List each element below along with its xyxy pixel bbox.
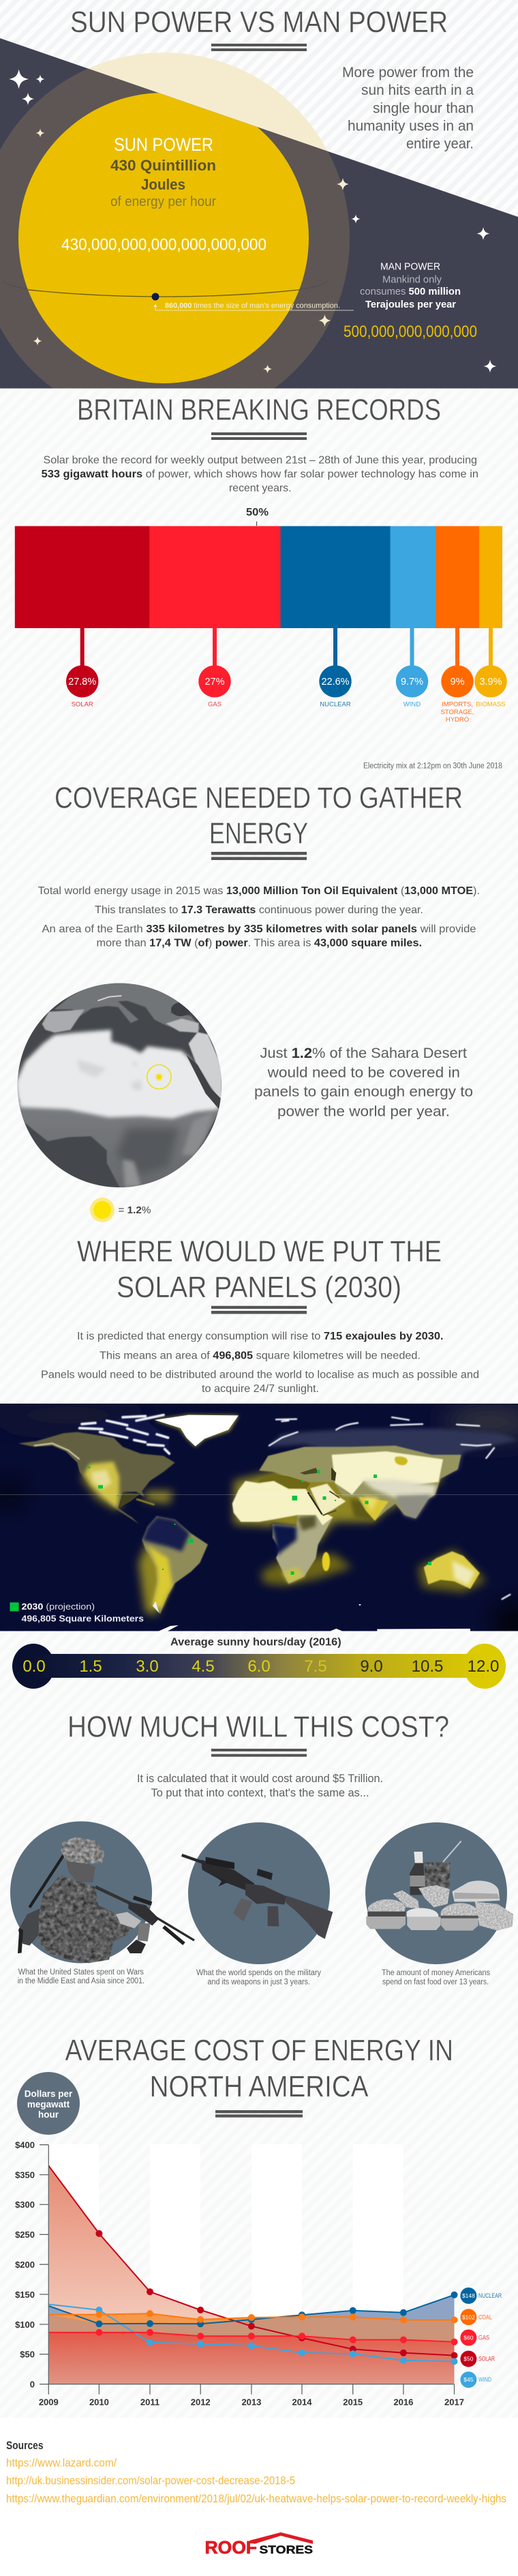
sahara and arabia bright: [232, 1481, 333, 1525]
heading: [65, 2034, 453, 2103]
logo: roof stores: STORES: [259, 2543, 313, 2556]
x axis labels: 2012: [191, 2397, 211, 2408]
intro paragraphs: This means an area of 496,805 square kilometres will be needed.: [100, 1350, 421, 1361]
area: solar: [48, 2165, 455, 2384]
intro paragraph: recent years.: [229, 482, 292, 494]
legend: sun symbol: [90, 1198, 151, 1222]
comparison: fast food: [365, 1822, 513, 1964]
panel: coverage needed: [16, 782, 480, 1222]
callout: imports: STORAGE,: [441, 709, 474, 716]
man power text: 500,000,000,000,000: [344, 323, 477, 341]
series legend: WIND: [478, 2376, 491, 2383]
x axis labels: 2017: [444, 2397, 464, 2408]
scale bar: [12, 1644, 506, 1689]
heading: SOLAR PANELS (2030): [117, 1271, 401, 1304]
series legend: $148: [462, 2292, 475, 2299]
arctic islands: [269, 1417, 510, 1599]
americas: [18, 1414, 239, 1615]
series legend: NUCLEAR: [478, 2292, 502, 2299]
eurasia: [259, 1446, 461, 1521]
y axis labels: $150: [15, 2290, 35, 2300]
series legend: GAS: [478, 2334, 489, 2341]
x axis labels: 2009: [39, 2397, 59, 2408]
heading: ENERGY: [209, 817, 308, 850]
x axis labels: [39, 2397, 464, 2408]
world map: [0, 1404, 518, 1644]
callout: solar: SOLAR: [72, 701, 93, 708]
line: nuclear: [48, 2292, 458, 2327]
callout: solar: 27.8%: [68, 677, 96, 687]
comparison caption: fast food: The amount of money Americans: [382, 1969, 490, 1977]
scale values: 1.5: [79, 1657, 102, 1676]
x axis labels: 2014: [292, 2397, 312, 2408]
sun power text: 430,000,000,000,000,000,000: [61, 236, 266, 254]
50 percent marker: [246, 507, 269, 526]
intro text: [342, 65, 474, 151]
man power text: consumes 500 million: [360, 286, 461, 297]
callout: nuclear: [319, 628, 352, 708]
y axis labels: [15, 2140, 35, 2390]
comparison caption: wars: [18, 1968, 144, 1985]
map legend: 496,805 Square Kilometers: [22, 1614, 144, 1624]
panel: average cost of energy: [15, 2034, 502, 2408]
sun power text: of energy per hour: [110, 194, 216, 209]
intro paragraphs: [41, 1331, 479, 1395]
icon: soldier: [18, 1837, 194, 1963]
man power text: MAN POWER: [380, 261, 440, 273]
turkey: [166, 1018, 199, 1033]
line: wind: [48, 2305, 458, 2365]
stars: [9, 70, 497, 374]
intro text: More power from the: [342, 65, 474, 80]
antarctica: [330, 1629, 470, 1631]
50 percent marker: 50%: [246, 507, 269, 518]
callout: biomass: BIOMASS: [476, 701, 506, 708]
y axis labels: $350: [15, 2170, 35, 2180]
intro paragraphs: This translates to 17.3 Terawatts continuous power during the year.: [95, 904, 423, 916]
panel: where would we put the panels: [0, 1234, 518, 1689]
heading rule: [215, 2110, 303, 2118]
panel: how much will this cost: [10, 1711, 513, 1986]
callout: biomass: 3.9%: [479, 677, 502, 687]
line: coal: [48, 2310, 458, 2323]
sahara statement: [254, 1046, 473, 1119]
callout: imports: 9%: [451, 677, 465, 687]
callout: nuclear: NUCLEAR: [320, 701, 351, 708]
x axis labels: 2016: [393, 2397, 413, 2408]
map legend: 2030 (projection): [22, 1601, 95, 1612]
unit badge: Dollars per: [25, 2089, 73, 2099]
icon: fast food: [366, 1841, 513, 1931]
callout: wind: 9.7%: [401, 677, 423, 687]
callout: biomass: [474, 628, 507, 708]
callout: imports: IMPORTS,: [442, 701, 473, 708]
callout: wind: WIND: [403, 701, 421, 708]
lower africa: [16, 1103, 224, 1189]
globe: sahara map: [16, 982, 224, 1189]
sources: http://uk.businessinsider.com/solar-power-cost-decrease-2018-5: [6, 2474, 295, 2487]
arabia: [189, 1032, 222, 1103]
chart note: Electricity mix at 2:12pm on 30th June 2018: [363, 763, 502, 771]
y axis labels: $400: [15, 2140, 35, 2150]
intro text: [137, 1772, 383, 1799]
series legend: $45: [463, 2376, 474, 2383]
y axis labels: 0: [30, 2379, 35, 2390]
intro text: humanity uses in an: [348, 119, 474, 134]
intro text: single hour than: [373, 101, 474, 116]
size comparison callout: 860,000 times the size of man's energy consumption.: [165, 302, 340, 310]
area: gas: [48, 2333, 455, 2384]
panel: footer: [0, 2418, 518, 2576]
intro paragraphs: An area of the Earth 335 kilometres by 335 kilometres with solar panels will provide: [42, 923, 476, 935]
sahara marker: [147, 1065, 171, 1089]
australia: [424, 1552, 480, 1589]
intro text: sun hits earth in a: [361, 83, 474, 98]
comparison: wars: [10, 1821, 194, 1963]
greenland: [155, 1415, 239, 1447]
iberia: [42, 1009, 85, 1033]
panel: britain breaking records: [15, 393, 507, 771]
intro paragraphs: more than 17,4 TW (of) power. This area is 43,000 square miles.: [97, 938, 422, 949]
intro text: entire year.: [406, 136, 474, 151]
sun halo: [0, 53, 350, 425]
heading rule: [211, 1749, 307, 1757]
heading: AVERAGE COST OF ENERGY IN: [65, 2034, 453, 2067]
scale values: [22, 1657, 499, 1676]
heading: WHERE WOULD WE PUT THE: [77, 1234, 442, 1268]
sun power text: Joules: [141, 176, 185, 193]
y axis labels: $50: [20, 2350, 35, 2360]
callout: gas: GAS: [208, 701, 222, 708]
heading: BRITAIN BREAKING RECORDS: [77, 393, 441, 427]
icon: rifle: [182, 1855, 333, 1939]
sky stripes: [0, 0, 518, 217]
x axis labels: 2011: [140, 2397, 159, 2408]
unit badge: megawatt: [27, 2099, 70, 2109]
alps snow: [97, 996, 121, 1001]
callout: nuclear: 22.6%: [321, 677, 350, 687]
y axis labels: $100: [15, 2320, 35, 2330]
sun power text: SUN POWER: [114, 134, 213, 155]
dark night panel: [0, 38, 518, 389]
comparison caption: fast food: [382, 1969, 490, 1986]
area: coal and nuclear overlap: [48, 2315, 455, 2384]
series legend: COAL: [478, 2313, 492, 2320]
unit badge: hour: [38, 2109, 59, 2120]
intro paragraph: Solar broke the record for weekly output between 21st – 28th of June this year, producing: [44, 455, 477, 467]
comparison caption: fast food: spend on fast food over 13 years.: [382, 1978, 489, 1986]
antarctic peninsula: [159, 1625, 179, 1631]
line and area chart: [15, 2140, 502, 2408]
map legend: [10, 1601, 144, 1624]
sun power text: [61, 134, 266, 254]
heading: [77, 1234, 442, 1304]
series legend: $50: [463, 2356, 474, 2363]
mediterranean and inland seas: [259, 1474, 310, 1489]
sources: [6, 2439, 506, 2505]
intro text: It is calculated that it would cost around $5 Trillion.: [137, 1772, 383, 1785]
logo: roof stores: [204, 2532, 313, 2558]
sun disc: [18, 93, 309, 383]
madagascar: [322, 1552, 330, 1571]
heading: HOW MUCH WILL THIS COST?: [67, 1711, 449, 1744]
callout: imports: HYDRO: [446, 716, 469, 724]
heading: [55, 782, 463, 850]
scale values: 4.5: [192, 1657, 215, 1676]
intro paragraphs: Panels would need to be distributed around the world to localise as much as possible and: [41, 1370, 479, 1381]
sahara statement: power the world per year.: [277, 1104, 450, 1119]
comparison caption: military: [196, 1969, 321, 1986]
comparison caption: wars: What the United States spent on Wars: [18, 1968, 144, 1977]
heading: NORTH AMERICA: [150, 2070, 369, 2103]
red sea: [186, 1055, 222, 1110]
chart axes: [40, 2145, 454, 2395]
south america: [142, 1516, 208, 1614]
series legend: $102: [462, 2313, 475, 2320]
x axis labels: 2010: [89, 2397, 109, 2408]
scale values: 12.0: [468, 1657, 499, 1676]
sources: Sources: [6, 2439, 44, 2452]
y axis labels: $250: [15, 2230, 35, 2240]
scale values: 10.5: [412, 1657, 443, 1676]
area: nuclear: [48, 2295, 455, 2384]
scale values: 7.5: [304, 1657, 327, 1676]
intro paragraph: [42, 455, 478, 494]
scale values: 6.0: [247, 1657, 271, 1676]
chart columns: [48, 2144, 403, 2384]
series legend: [460, 2288, 502, 2388]
canadian arctic: [78, 1414, 169, 1453]
panel sites: [89, 1466, 431, 1575]
series legend: SOLAR: [478, 2356, 495, 2363]
intro paragraphs: Total world energy usage in 2015 was 13,000 Million Ton Oil Equivalent (13,000 MTOE).: [38, 885, 480, 897]
heading rule: [211, 1306, 307, 1314]
logo: roof stores: ROOF: [204, 2538, 257, 2558]
scale values: 0.0: [22, 1657, 46, 1676]
callout: gas: [198, 628, 231, 708]
callout: imports: [441, 628, 474, 724]
sunny hours scale: [12, 1637, 506, 1689]
sources: https://www.lazard.com/: [6, 2457, 117, 2470]
heading rule: [211, 432, 307, 440]
panel: sun power vs man power: [0, 11, 518, 389]
orbit of man power: [3, 280, 327, 300]
sahara statement: would need to be covered in: [267, 1065, 460, 1080]
callout: gas: 27%: [204, 677, 225, 687]
map haze: [0, 1404, 518, 1644]
comparison caption: wars: in the Middle East and Asia since 2001.: [18, 1977, 144, 1985]
old world: [232, 1417, 518, 1633]
y axis labels: $200: [15, 2260, 35, 2270]
x axis labels: 2015: [343, 2397, 363, 2408]
man power text: Mankind only: [382, 274, 442, 285]
man power text: Terajoules per year: [365, 299, 456, 310]
x axis labels: 2013: [241, 2397, 261, 2408]
comparison: military: [182, 1822, 333, 1964]
sahara: [16, 1030, 218, 1119]
sahara statement: panels to gain enough energy to: [254, 1084, 473, 1100]
stacked bar: [15, 526, 502, 628]
callout: solar: [66, 628, 98, 708]
title rule: [211, 44, 307, 51]
sun power text: 430 Quintillion: [110, 157, 216, 174]
callout: wind: [396, 628, 428, 708]
man power text: [344, 261, 477, 341]
y axis labels: $300: [15, 2200, 35, 2210]
scale title: Average sunny hours/day (2016): [170, 1637, 341, 1648]
scale values: 3.0: [136, 1657, 159, 1676]
area: coal: [48, 2313, 455, 2384]
intro paragraphs: It is predicted that energy consumption will rise to 715 exajoules by 2030.: [77, 1331, 443, 1342]
title: SUN POWER VS MAN POWER: [70, 5, 448, 39]
comparison caption: military: and its weapons in just 3 years.: [207, 1978, 310, 1986]
scale values: 9.0: [360, 1657, 383, 1676]
black sea: [171, 1003, 190, 1016]
heading rule: [211, 852, 307, 860]
intro text: To put that into context, that's the same as...: [151, 1786, 369, 1799]
yellow glow: [228, 1468, 447, 1548]
intro paragraph: 533 gigawatt hours of power, which shows how far solar power technology has come in: [42, 469, 478, 480]
sahara statement: Just 1.2% of the Sahara Desert: [260, 1046, 467, 1061]
line: solar: [48, 2165, 458, 2359]
africa south: [273, 1515, 333, 1584]
unit badge: [17, 2072, 80, 2135]
map grid line: [0, 1494, 518, 1495]
intro paragraphs: [38, 885, 480, 949]
europe: [55, 982, 200, 1033]
series legend: $60: [463, 2334, 474, 2341]
intro paragraphs: to acquire 24/7 sunlight.: [202, 1383, 319, 1395]
legend: sun symbol: = 1.2%: [119, 1205, 151, 1216]
line: gas: [48, 2329, 458, 2345]
northern asia: [268, 1429, 518, 1479]
caribbean: [136, 1499, 155, 1505]
comparison caption: military: What the world spends on the military: [196, 1969, 321, 1977]
